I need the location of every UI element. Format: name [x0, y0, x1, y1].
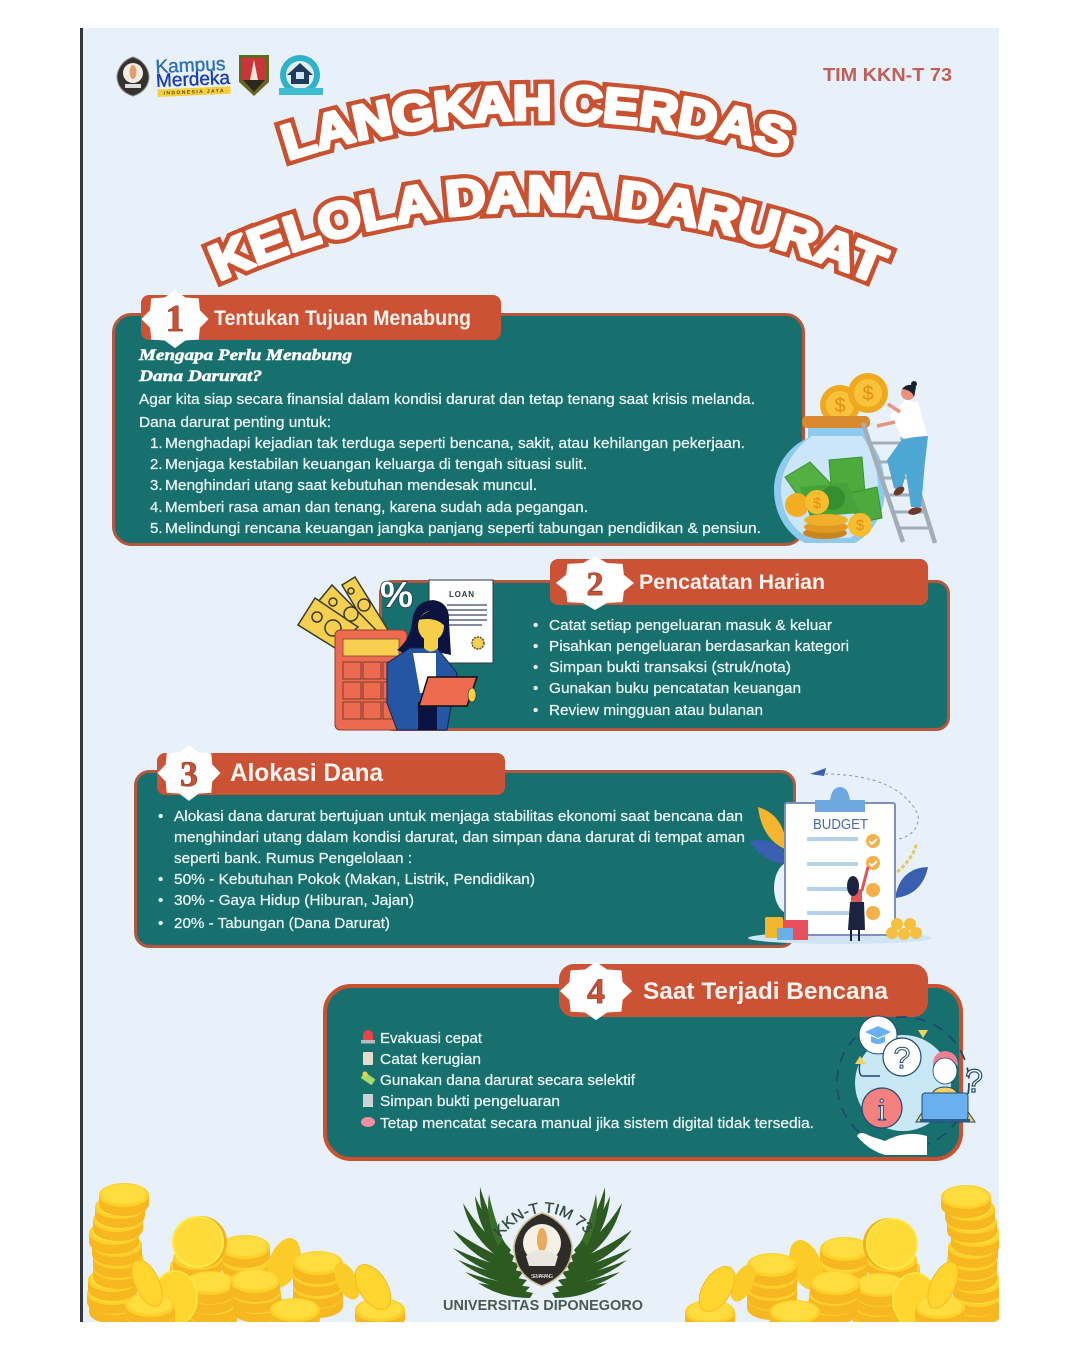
step 1 body text: Menjaga kestabilan keuangan keluarga di tengah situasi sulit.: [165, 456, 587, 473]
panel: step 1: [114, 290, 804, 544]
step 1 subheading: Dana Darurat?: [138, 368, 262, 385]
step 4 list: Gunakan dana darurat secara selektif: [380, 1072, 636, 1089]
title: curved heading: KELOLA DANA DARURAT: [200, 170, 898, 288]
icon: flying money: [361, 1072, 375, 1085]
coin pile: right: [685, 1185, 999, 1322]
step 2 header: Pencatatan Harian: [639, 571, 825, 594]
step 2 bullet list: •: [533, 659, 538, 676]
logo: Kampus Merdeka: Merdeka: [156, 68, 231, 92]
icon: woman with calculator, cash and loan document: [298, 574, 493, 730]
icon: receipt: [363, 1094, 373, 1107]
step 1 body text: [139, 391, 761, 537]
emblem right wing: [552, 1187, 632, 1298]
step 1 subheading: Mengapa Perlu Menabung: [138, 347, 352, 364]
step 4 list: Simpan bukti pengeluaran: [380, 1093, 560, 1110]
icon: coin jar and woman on ladder: $: [834, 395, 846, 417]
logo: Kampus Merdeka: [155, 54, 231, 97]
icon: coin jar and woman on ladder: $: [813, 495, 822, 512]
panel: step 2: [380, 556, 948, 730]
step 1 body text: Melindungi rencana keuangan jangka panjang seperti tabungan pendidikan & pensiun.: [165, 520, 761, 537]
step 3 bullet list: 30% - Gaya Hidup (Hiburan, Jajan): [174, 892, 414, 909]
icon: coin jar and woman on ladder: $: [862, 383, 874, 405]
icon: help and information person: ?: [894, 1042, 910, 1075]
step 3 header: 3: [180, 754, 198, 794]
icon: coin jar and woman on ladder: $: [856, 517, 865, 534]
step 1 body text: Dana darurat penting untuk:: [139, 414, 331, 431]
step 2 header: 2: [586, 566, 604, 603]
emblem left wing: [453, 1187, 533, 1298]
step 3 header: Alokasi Dana: [230, 759, 384, 787]
icon: help and information person: [837, 1016, 983, 1155]
logo: KKN team house: [279, 55, 323, 95]
step 3 bullet list: Alokasi dana darurat bertujuan untuk menjaga stabilitas ekonomi saat bencana dan: [174, 808, 743, 825]
step 4 header: 4: [587, 971, 605, 1011]
logo: Central Java shield: [239, 55, 269, 96]
step 3 bullet list: [158, 808, 745, 932]
step 1 body text: 2.: [150, 456, 163, 473]
step 4 list: Catat kerugian: [380, 1051, 481, 1068]
step 2 bullet list: •: [533, 638, 538, 655]
left edge line: [80, 28, 83, 1322]
title: curved heading: LANGKAH CERDAS: [274, 80, 797, 166]
emblem arc text: KKN-T TIM 73: [493, 1202, 593, 1237]
icon: help and information person: i: [878, 1091, 887, 1127]
icon: brain: [361, 1117, 375, 1127]
icon: budget clipboard with woman: [748, 768, 932, 944]
icon: budget clipboard with woman: BUDGET: [813, 816, 868, 833]
step 2 bullet list: Simpan bukti transaksi (struk/nota): [549, 659, 791, 676]
icon: help and information person: ?: [965, 1063, 983, 1099]
panel: step 4: [325, 962, 961, 1159]
step 2 bullet list: [533, 617, 849, 719]
step 2 bullet list: Gunakan buku pencatatan keuangan: [549, 680, 801, 697]
step 4 header: Saat Terjadi Bencana: [643, 978, 889, 1005]
logo: Universitas Diponegoro shield: [117, 57, 149, 96]
partner logos: [117, 54, 323, 97]
step 1 body text: 1.: [150, 435, 163, 452]
icon: coin jar and woman on ladder: [774, 373, 935, 543]
step 2 bullet list: Review mingguan atau bulanan: [549, 702, 763, 719]
step 3 bullet list: •: [158, 892, 163, 909]
panel: step 3: [136, 745, 794, 946]
step 1 body text: 3.: [150, 477, 163, 494]
logo: Kampus Merdeka: INDONESIA JAYA: [163, 88, 224, 97]
emblem caption: UNIVERSITAS DIPONEGORO: [443, 1298, 643, 1314]
icon: siren: [361, 1030, 375, 1044]
step 1 header: 1: [166, 298, 184, 340]
logo: Kampus Merdeka: Kampus: [155, 54, 226, 78]
emblem shield: SEMARANG: [531, 1274, 553, 1280]
step 1 body text: Menghindari utang saat kebutuhan mendesak muncul.: [165, 477, 537, 494]
step 2 bullet list: •: [533, 617, 538, 634]
step 1 body text: Memberi rasa aman dan tenang, karena sudah ada pegangan.: [165, 499, 588, 516]
step 1 body text: 4.: [150, 499, 163, 516]
step 1 body text: 5.: [150, 520, 163, 537]
step 4 list: Tetap mencatat secara manual jika sistem digital tidak tersedia.: [380, 1115, 814, 1132]
title: curved heading: KELOLA DANA DARURAT: [207, 174, 892, 282]
coin pile: left: [87, 1183, 405, 1336]
title: curved heading: [200, 80, 898, 288]
step 4 list: [361, 1030, 814, 1132]
title: curved heading: LANGKAH CERDAS: [280, 84, 792, 161]
step 1 header: [141, 290, 501, 348]
emblem shield: [514, 1213, 572, 1286]
icon: woman with calculator, cash and loan document: LOAN: [449, 590, 474, 599]
step 2 bullet list: Pisahkan pengeluaran berdasarkan kategori: [549, 638, 849, 655]
step 3 bullet list: seperti bank. Rumus Pengelolaan :: [174, 850, 412, 867]
icon: clipboard: [363, 1052, 373, 1065]
step 4 header: [559, 962, 928, 1020]
team label: TIM KKN-T 73: [823, 65, 952, 85]
step 2 header: [550, 556, 928, 610]
step 3 header: [157, 745, 505, 801]
logo: KKN-T Tim 73 winged emblem: [443, 1187, 643, 1314]
step 1 subheading: [138, 347, 352, 385]
icon: woman with calculator, cash and loan document: %: [380, 574, 413, 615]
step 3 bullet list: menghindari utang dalam kondisi darurat, dan simpan dana darurat di tempat aman: [174, 829, 745, 846]
step 3 bullet list: •: [158, 915, 163, 932]
step 3 bullet list: 50% - Kebutuhan Pokok (Makan, Listrik, Pendidikan): [174, 871, 535, 888]
step 4 list: Evakuasi cepat: [380, 1030, 483, 1047]
step 1 body text: Menghadapi kejadian tak terduga seperti bencana, sakit, atau kehilangan pekerjaan.: [165, 435, 745, 452]
step 1 header: Tentukan Tujuan Menabung: [214, 307, 471, 330]
step 3 bullet list: 20% - Tabungan (Dana Darurat): [174, 915, 390, 932]
step 3 bullet list: •: [158, 871, 163, 888]
step 3 bullet list: •: [158, 808, 163, 825]
step 1 body text: Agar kita siap secara finansial dalam kondisi darurat dan tetap tenang saat krisis melanda.: [139, 391, 755, 408]
step 2 bullet list: Catat setiap pengeluaran masuk & keluar: [549, 617, 832, 634]
step 2 bullet list: •: [533, 680, 538, 697]
step 2 bullet list: •: [533, 702, 538, 719]
